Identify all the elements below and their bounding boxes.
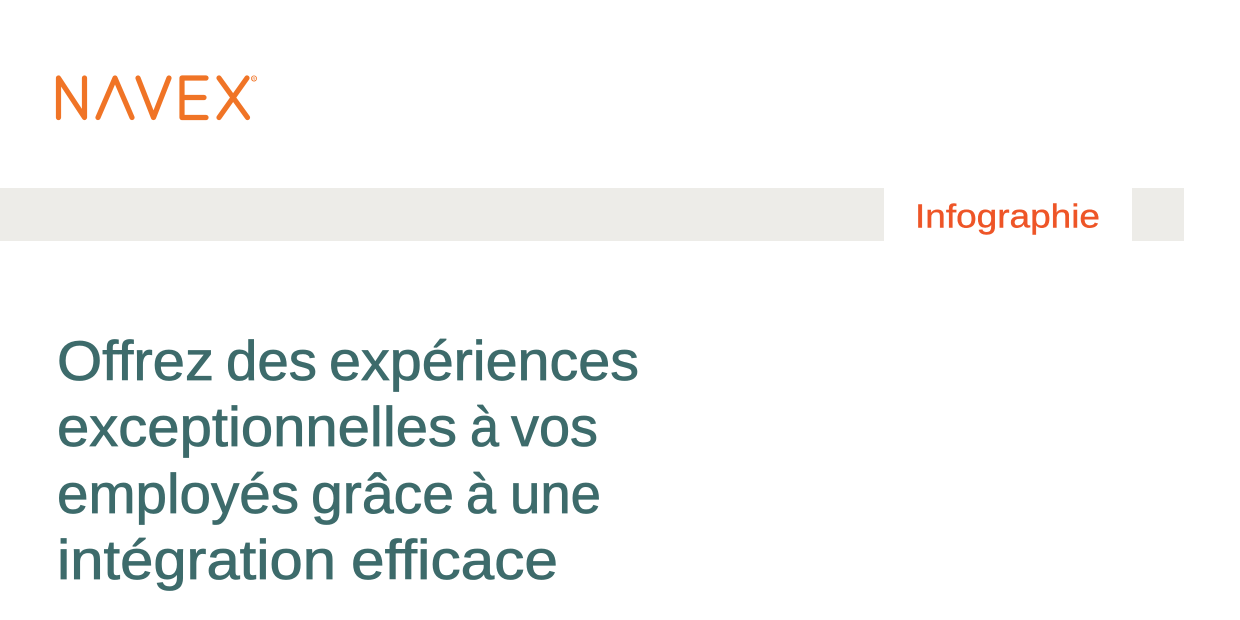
logo letter V	[138, 78, 169, 118]
header band right segment	[1132, 188, 1184, 241]
title line 2: exceptionnelles	[57, 395, 457, 458]
title line 4: intégration	[57, 528, 336, 591]
title	[57, 329, 639, 591]
label: Infographie: Infographie	[915, 198, 1100, 236]
title line 1: Offrez	[57, 329, 214, 392]
header band left segment	[0, 188, 884, 241]
title line 3: une	[510, 462, 601, 525]
logo registered mark	[251, 76, 257, 81]
logo letter A without crossbar	[98, 78, 132, 118]
logo letter X	[219, 78, 248, 118]
title line 1: des	[226, 329, 317, 392]
title line 2: à	[470, 395, 500, 458]
title line 3: employés	[57, 462, 299, 525]
title line 3: à	[466, 462, 497, 525]
title line 1: expériences	[329, 329, 639, 392]
logo letter N	[58, 78, 84, 118]
title line 3: grâce	[311, 462, 454, 525]
title line 4	[57, 528, 558, 591]
title line 3	[57, 462, 601, 525]
title line 2: vos	[511, 395, 598, 458]
title line 1	[57, 329, 639, 392]
logo registered mark: R	[252, 76, 256, 81]
title line 4: efficace	[351, 528, 558, 591]
logo: NAVEX	[58, 76, 257, 118]
logo letter E	[182, 78, 206, 118]
